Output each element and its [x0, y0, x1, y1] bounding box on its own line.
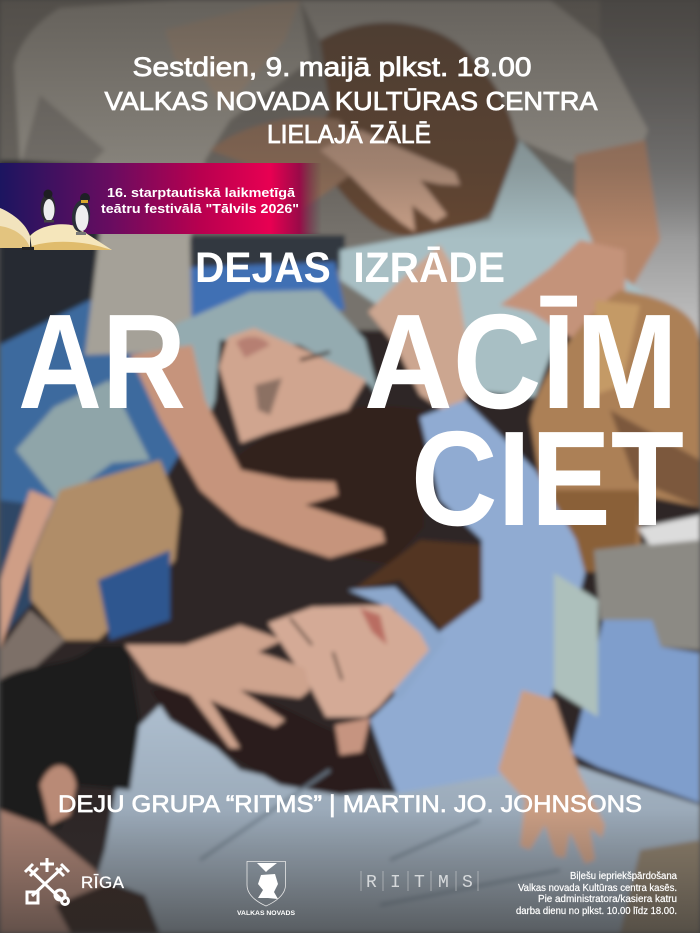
- top shirts: [14, 0, 310, 355]
- hand lower: [125, 625, 310, 748]
- hair lower: [150, 680, 384, 795]
- logo: Valkas novads: [237, 862, 295, 917]
- ticket info: Biļešu iepriekšpārdošana: [570, 871, 678, 882]
- logo: Riga: [25, 858, 125, 904]
- blue shirt: [370, 400, 585, 793]
- right hand: [500, 240, 625, 395]
- sleeve left: [16, 380, 150, 503]
- black hair left: [0, 645, 140, 830]
- ticket info: Pie administratora/kasiera katru: [538, 894, 677, 905]
- tan shirt: [31, 460, 180, 640]
- blonde hair: [530, 290, 700, 572]
- main title: AR: [18, 286, 186, 437]
- ticket info: Valkas novada Kultūras centra kasēs.: [518, 883, 677, 894]
- neck lower-left: [0, 810, 135, 933]
- event date and venue: [104, 52, 598, 149]
- logo: Valkas novads: VALKAS NOVADS: [237, 910, 295, 917]
- banner: festival ribbon: [0, 163, 322, 250]
- bottom shirt: [80, 700, 700, 933]
- ticket info: [516, 871, 678, 917]
- jacket blue patch: [98, 550, 170, 640]
- hall line: LIELAJĀ ZĀLĒ: [267, 119, 431, 149]
- face 3: [268, 605, 429, 717]
- banner text: [101, 186, 299, 216]
- ticket info: darba dienu no plkst. 10.00 līdz 18.00.: [516, 906, 677, 917]
- face 1: [219, 328, 366, 443]
- light shirt back: [340, 140, 672, 397]
- icon: shield with bear: [247, 862, 286, 906]
- brown hair: [353, 540, 482, 640]
- logo: Ritms: S: [462, 873, 473, 893]
- grey right: [594, 525, 700, 650]
- right blue: [571, 620, 700, 803]
- subtitle: DEJAS IZRĀDE: [195, 244, 505, 292]
- logo: Riga: RĪGA: [81, 873, 125, 892]
- green shirt: [554, 573, 598, 717]
- arm: [130, 345, 385, 558]
- icon: open book: [0, 208, 112, 250]
- logo: Ritms: I: [390, 873, 401, 893]
- logo: Ritms: M: [438, 873, 449, 893]
- banner text: teātru festivālā "Tālvils 2026": [101, 202, 299, 216]
- main title: ACĪM: [364, 286, 678, 437]
- icon: penguin right: [70, 193, 92, 235]
- venue line: VALKAS NOVADA KULTŪRAS CENTRA: [104, 86, 598, 116]
- logo: Ritms: T: [414, 873, 425, 893]
- credits line: DEJU GRUPA “RITMS” | MARTIN. JO. JOHNSONS: [58, 791, 642, 818]
- hand mid: [368, 245, 470, 420]
- date line: Sestdien, 9. maijā plkst. 18.00: [132, 52, 532, 82]
- collar shirt upper: [174, 290, 380, 440]
- right hand lower: [498, 690, 605, 864]
- logo: Ritms: R: [366, 873, 377, 893]
- right arm: [575, 140, 660, 300]
- main title: [18, 286, 684, 554]
- banner text: 16. starptautiskā laikmetīgā: [107, 186, 296, 200]
- logo: Ritms: [361, 871, 478, 893]
- icon: crossed keys: [25, 858, 69, 904]
- hair person 1: [232, 406, 424, 565]
- hand top: [320, 130, 460, 232]
- icon: penguin left: [40, 190, 56, 222]
- hair top: [320, 22, 518, 237]
